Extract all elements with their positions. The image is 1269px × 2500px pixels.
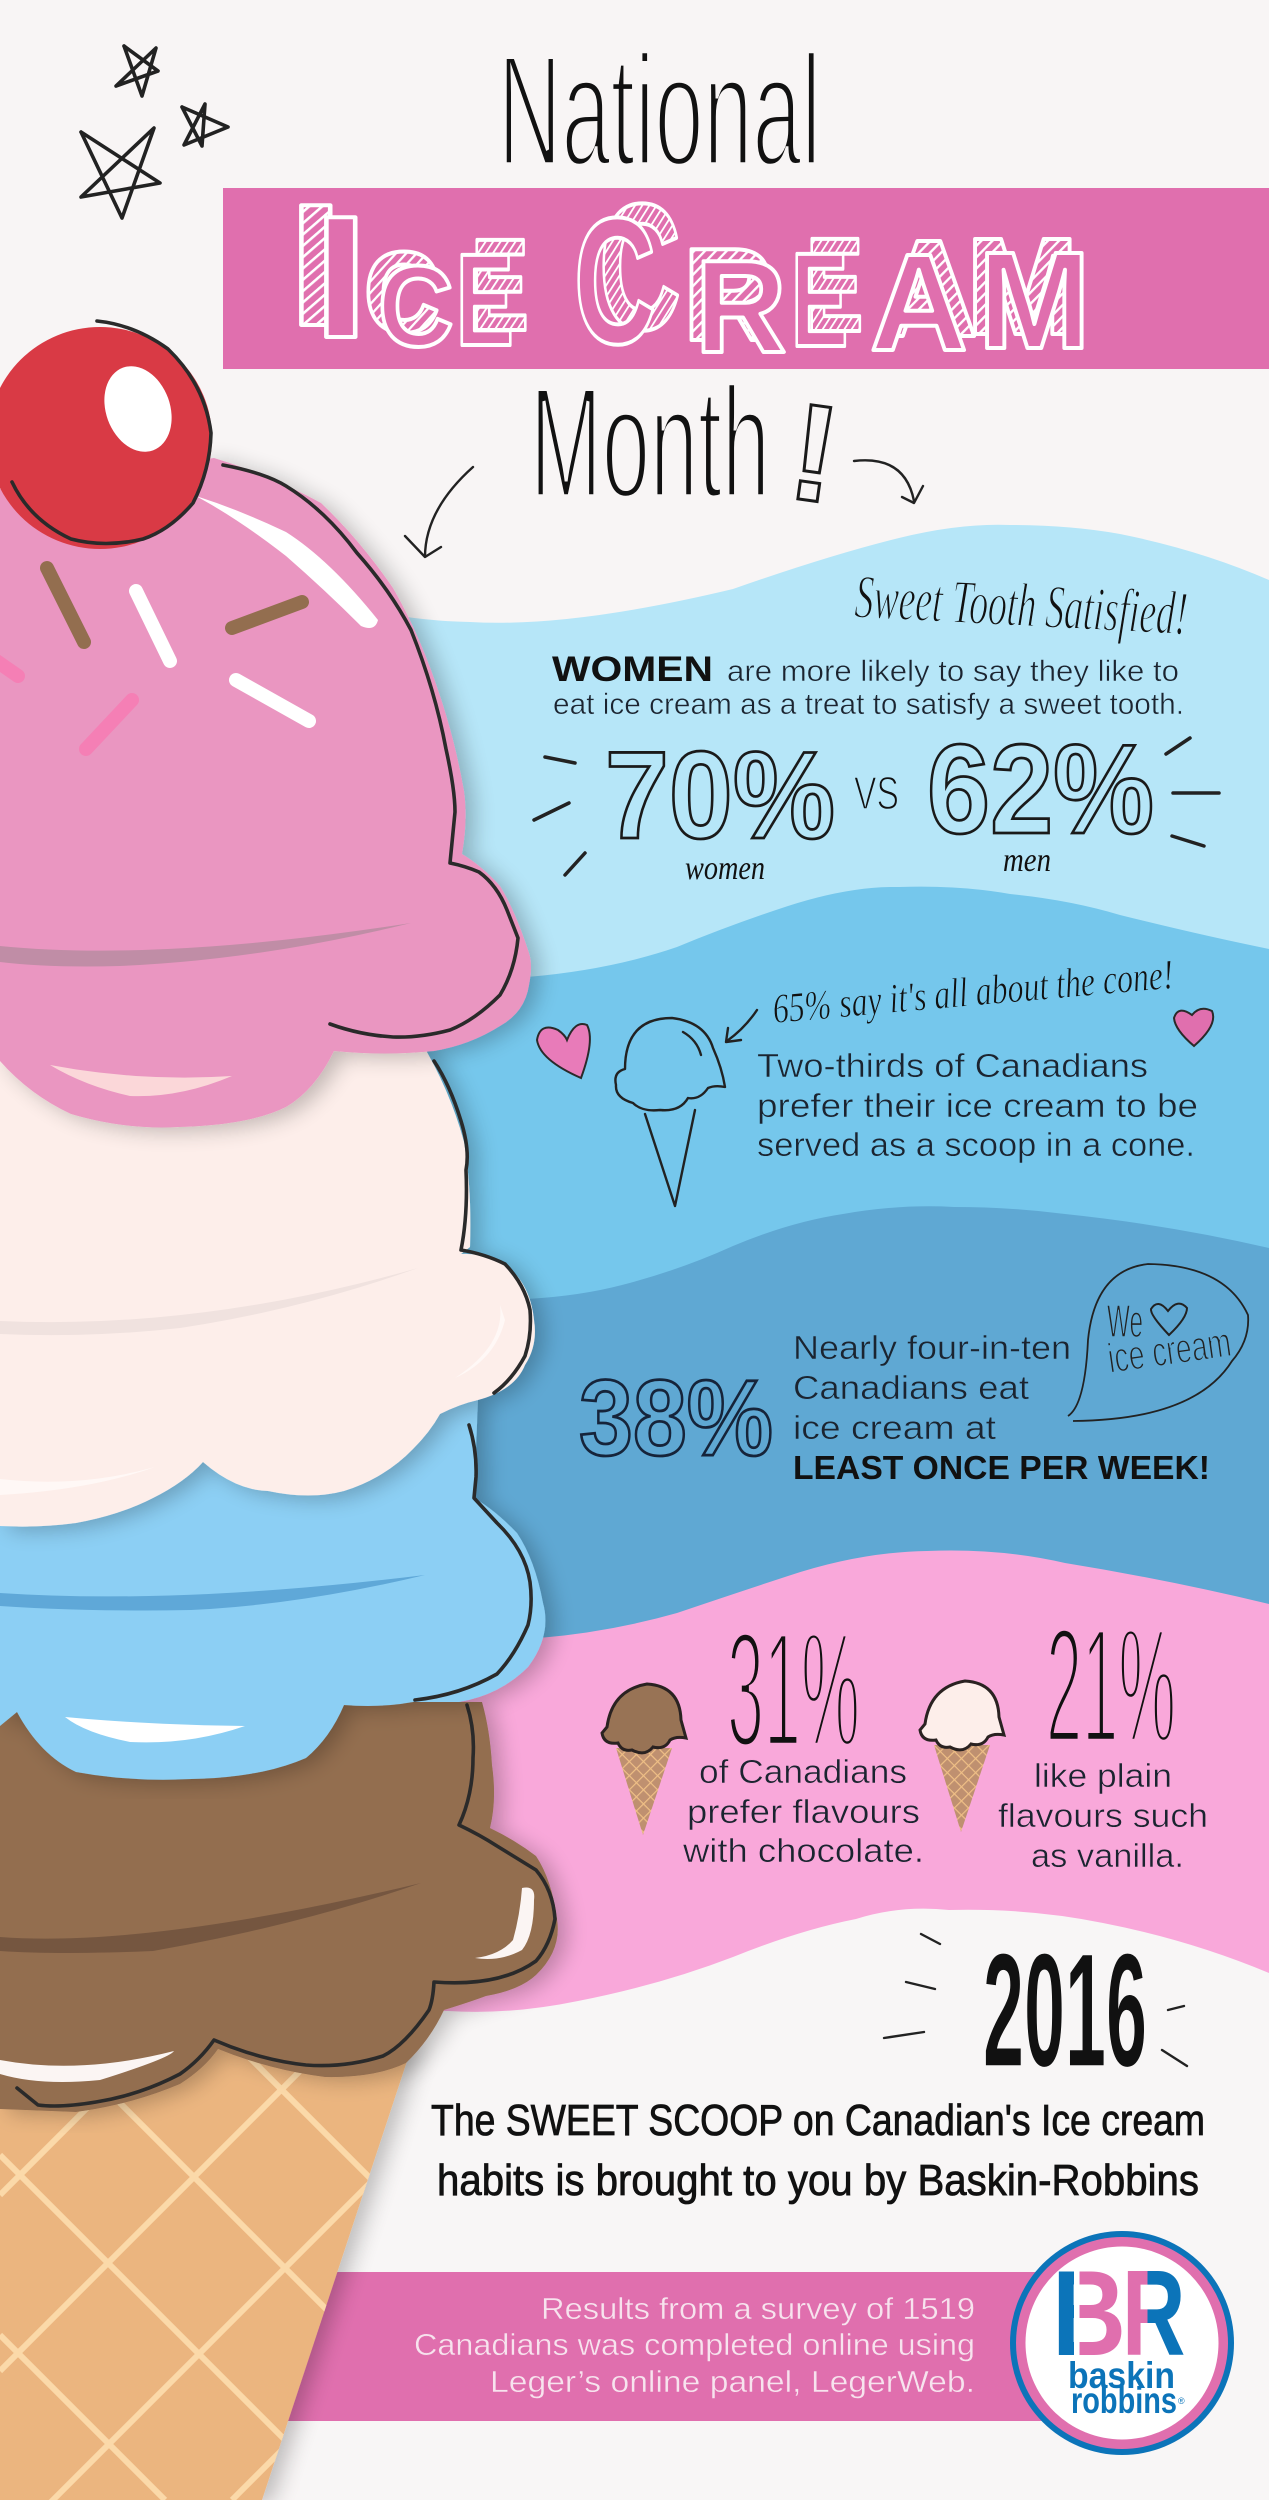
title: Ice Cream: C [574,180,656,381]
women statement: are more likely to say they like to [727,655,1179,688]
icon: vanilla cone [920,1681,1004,1832]
logo: Baskin-Robbins: R [1122,2245,1185,2381]
icon: heart left [537,1024,590,1078]
weekly statement: Canadians eat [793,1369,1029,1406]
weekly statement [793,1329,1210,1486]
title: Ice Cream: C [378,242,454,371]
icon: chocolate cone [602,1684,686,1835]
weekly statement: Nearly four-in-ten [793,1329,1071,1366]
cone statement [757,1047,1198,1163]
speech bubble [1068,1264,1248,1421]
cherry [0,321,212,549]
panel: weekly eating [579,1264,1248,1486]
icon: scoop in cone [615,1018,725,1206]
title: Ice Cream: E [791,225,848,375]
weekly statement: ice cream at [793,1409,996,1446]
vanilla scoop [0,1000,535,1527]
38 percent: 38% [579,1357,773,1478]
year 2016 [884,1920,1187,2101]
cone statement: served as a scoop in a cone. [757,1126,1195,1163]
70 percent women: women [685,850,765,887]
cone statement: prefer their ice cream to be [757,1087,1198,1124]
title: Ice Cream: M [978,223,1091,377]
chocolate scoop [0,1700,558,2112]
weekly statement: LEAST ONCE PER WEEK! [793,1449,1210,1486]
62 percent men: men [1003,842,1051,879]
panel: sweet tooth [534,563,1219,887]
sweet scoop statement [431,2096,1205,2205]
footer bar: survey note: Canadians was completed online using [414,2328,975,2362]
title: Ice Cream: R [695,234,787,381]
ice cream cone illustration [0,319,577,2500]
footer bar: survey note: Leger’s online panel, LegerWeb. [490,2365,975,2399]
arrow: to ice cream [405,467,473,557]
vanilla statement: as vanilla. [1031,1837,1184,1874]
chocolate statement: of Canadians [699,1753,907,1790]
women statement: WOMEN [552,650,713,689]
title: National: National [498,23,821,199]
vanilla statement: flavours such [998,1797,1208,1834]
title: Ice Cream [288,166,1091,381]
70 percent women: 70% [605,727,835,865]
vanilla statement [998,1757,1208,1874]
vanilla statement: like plain [1034,1757,1172,1794]
background wave bands [300,525,1269,2500]
title: Ice Cream: I [313,179,369,374]
burst marks [534,738,1219,875]
waffle cone [0,2044,428,2500]
title: Ice Cream: M [966,209,1079,363]
arrow: to stats [854,460,923,503]
women statement: eat ice cream as a treat to satisfy a sweet tooth. [553,688,1184,721]
panel: flavours [602,1594,1208,1874]
sprinkles [0,568,309,749]
arrow to cone [726,1010,757,1042]
chocolate statement: prefer flavours [687,1793,920,1830]
title: Ice Cream: E [806,210,863,360]
icon: heart right [1174,1009,1213,1046]
title: Ice Cream: E [456,227,514,373]
cone statement: Two-thirds of Canadians [757,1047,1148,1084]
logo: Baskin-Robbins [1010,2231,1234,2455]
title: Ice Cream: E [471,212,529,358]
chocolate statement [682,1753,924,1869]
women statement [552,650,1184,721]
vs: VS [854,767,899,819]
sweet scoop statement: habits is brought to you by Baskin-Robbins [437,2156,1199,2205]
title: Ice Cream: I [288,167,344,362]
logo: Baskin-Robbins: ® [1178,2396,1185,2406]
blue scoop [0,1400,545,1780]
logo: Baskin-Robbins: robbins [1071,2380,1177,2421]
panel: cone preference [537,952,1213,1206]
speech bubble: We [1107,1295,1143,1347]
chocolate statement: with chocolate. [682,1832,924,1869]
title: Ice Cream: A [870,225,968,379]
panel: flavours: 31% [727,1598,860,1781]
strawberry scoop [0,458,531,1127]
title: Month!: Month [530,355,770,531]
title: Ice Cream: C [364,228,440,357]
footer bar: survey note: Results from a survey of 1519 [541,2292,975,2326]
title banner [223,188,1269,369]
title: Ice Cream: C [599,166,681,367]
footer bar: survey note [270,2272,1060,2421]
logo: Baskin-Robbins: B [1052,2245,1126,2381]
62 percent men: 62% [927,718,1154,860]
title: Ice Cream: A [880,211,978,365]
title: Ice Cream: R [683,222,775,369]
logo: Baskin-Robbins: baskin [1068,2355,1175,2396]
title: Month!: ! [781,374,848,533]
icon: stars [81,46,228,218]
